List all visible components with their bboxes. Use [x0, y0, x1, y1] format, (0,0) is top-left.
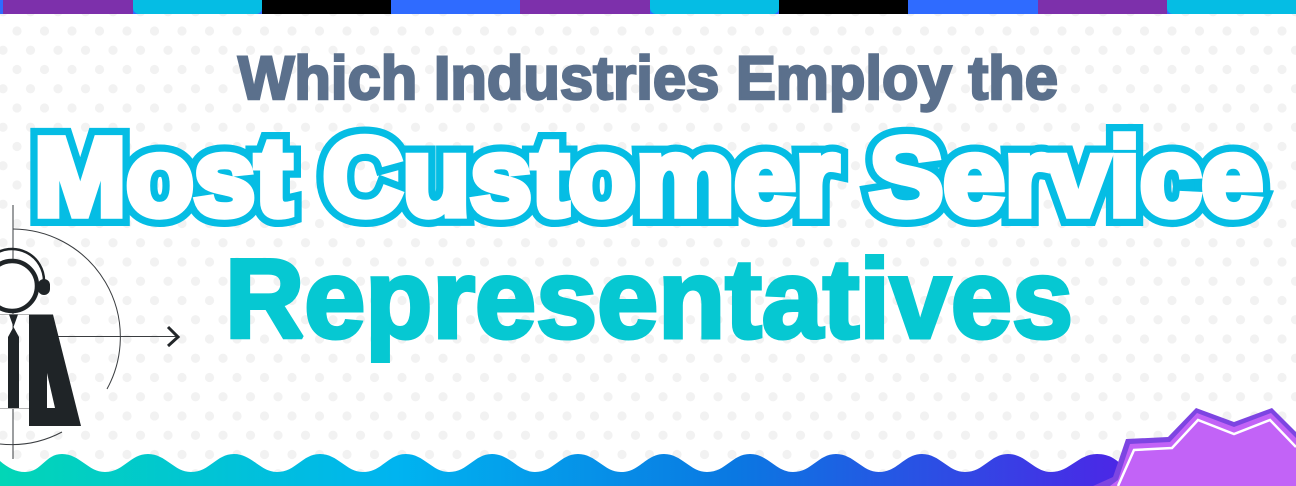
mountain shape [1093, 408, 1296, 486]
title line 3: Representatives [225, 236, 1073, 362]
title line 2: outlined: Most Customer Service [34, 116, 1263, 239]
icon: tie [8, 314, 19, 408]
title line 2: outlined: Most Customer Service [34, 116, 1263, 239]
icon: arrow head [168, 327, 178, 346]
wave band [0, 454, 1126, 486]
icon: customer service representative with target and arrow [0, 205, 178, 459]
icon: jacket [29, 314, 81, 426]
title line 1: Which Industries Employ the [238, 44, 1058, 112]
icon: head and headset [0, 249, 50, 311]
top colour bar [0, 0, 1296, 14]
